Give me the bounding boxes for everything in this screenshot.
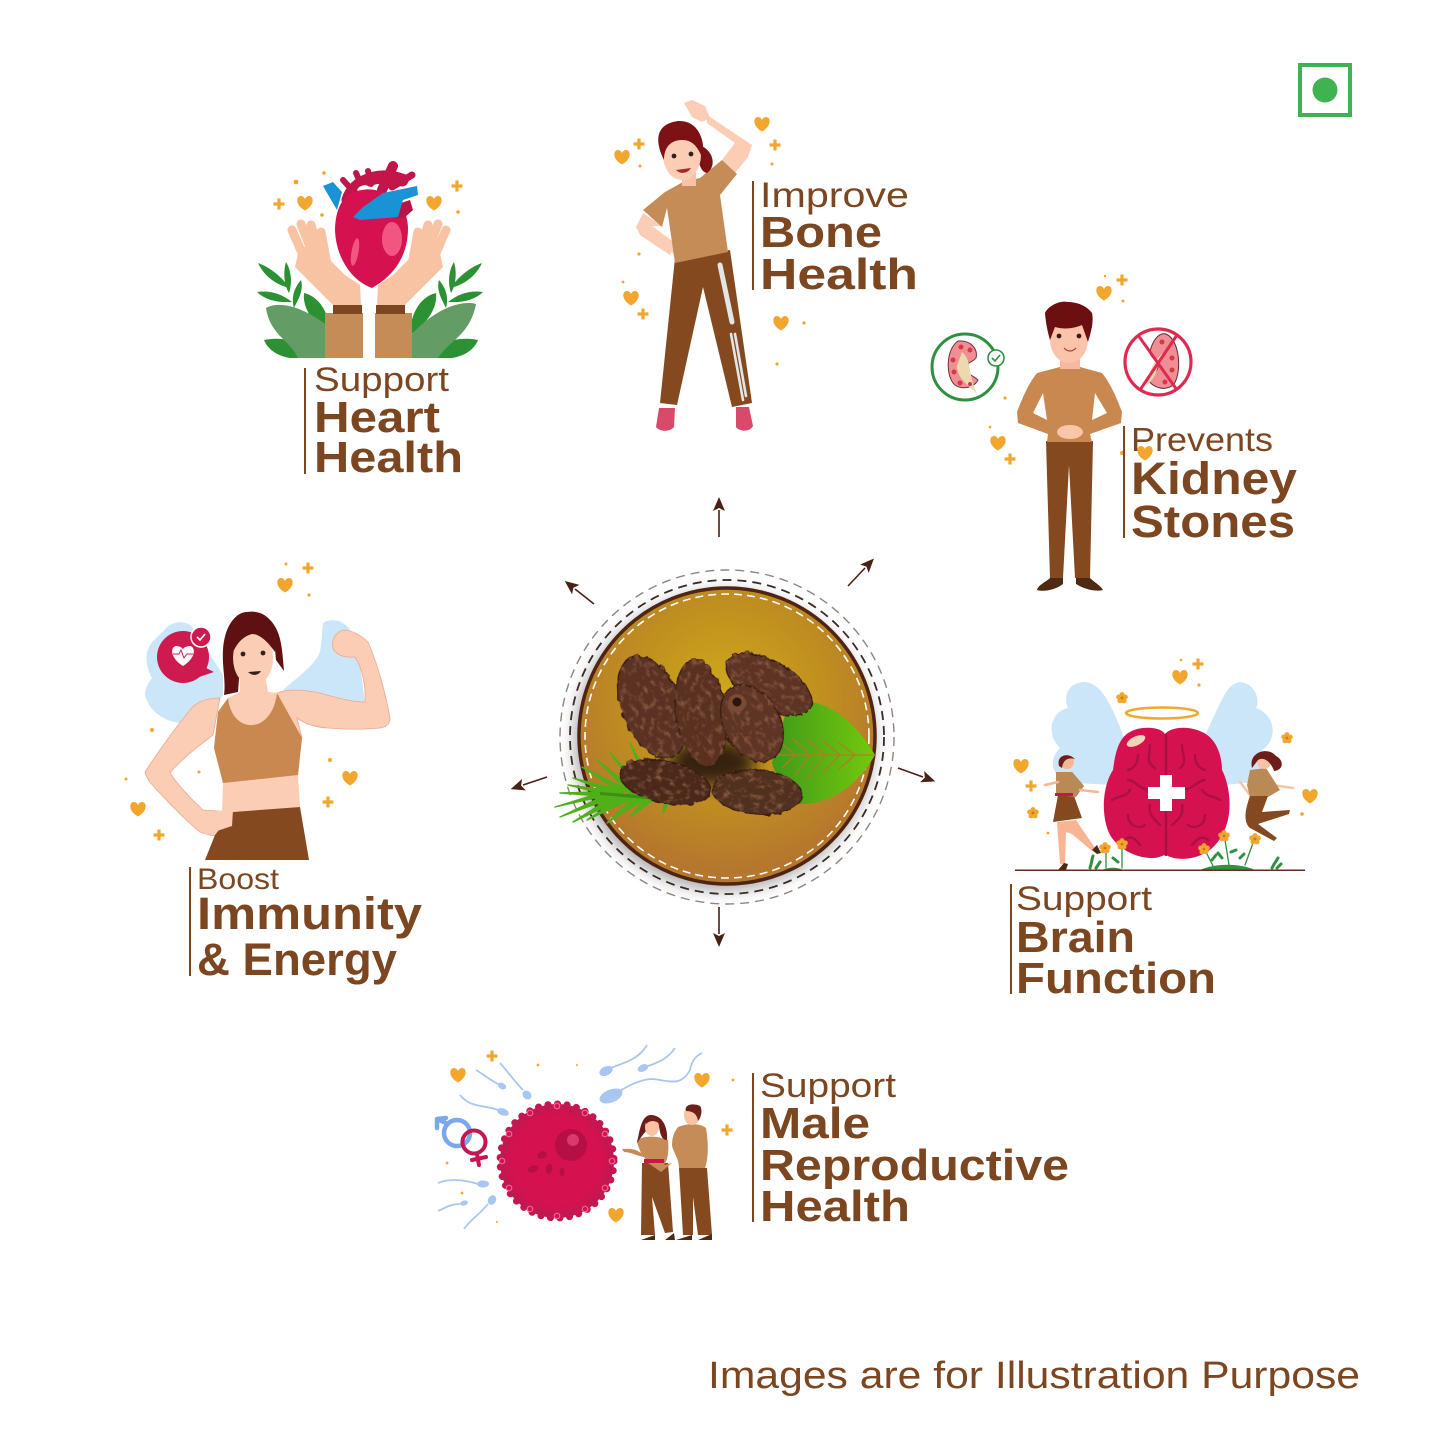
medical cross xyxy=(1148,775,1185,811)
stitched line xyxy=(585,594,869,878)
leg bones xyxy=(720,265,746,400)
illustration: man stretching with leg bones xyxy=(614,100,806,431)
label: support brain function: Brain xyxy=(1016,913,1135,962)
label: support heart health: Support xyxy=(314,361,450,399)
footnote: Images are for Illustration Purpose xyxy=(708,1355,1360,1397)
plate xyxy=(579,588,875,884)
label: prevents kidney stones: Stones xyxy=(1131,496,1295,547)
right arm xyxy=(277,630,390,738)
pants xyxy=(660,250,752,407)
label: improve bone health xyxy=(752,176,918,299)
dates xyxy=(604,640,822,818)
label: support heart health: Heart xyxy=(314,393,440,442)
label: support brain function: Support xyxy=(1016,880,1153,918)
neck and head xyxy=(658,121,713,186)
sparkles xyxy=(614,117,789,330)
ground line xyxy=(1015,870,1305,871)
label: support male reproductive health: Reproductive xyxy=(760,1141,1069,1190)
halo xyxy=(1126,708,1198,718)
brain xyxy=(1104,728,1230,859)
panel: male reproductive health xyxy=(437,1045,1069,1240)
egg cell xyxy=(499,1103,615,1219)
panel: immunity and energy xyxy=(124,562,422,985)
leaves xyxy=(257,262,483,358)
sparkles xyxy=(130,562,358,840)
illustration: winged brain xyxy=(1013,658,1318,871)
label: support male reproductive health: Health xyxy=(760,1182,910,1231)
dates shadow xyxy=(668,738,756,786)
hair xyxy=(223,612,284,695)
neck, chest and belly xyxy=(214,680,302,812)
sleeves xyxy=(325,313,412,358)
face xyxy=(233,622,275,686)
shirt and arms xyxy=(1017,367,1122,442)
arrows radiating from centre xyxy=(523,510,923,934)
label: boost immunity and energy: Immunity xyxy=(197,888,422,939)
label: prevents kidney stones xyxy=(1123,421,1297,547)
illustration: egg and couple xyxy=(437,1045,734,1240)
sparkles xyxy=(450,1050,732,1222)
neck and head xyxy=(1045,302,1093,369)
illustration: man with kidneys xyxy=(932,274,1191,591)
panel: kidney stones xyxy=(932,274,1297,591)
shorts xyxy=(205,807,309,860)
hand xyxy=(203,810,233,835)
wings xyxy=(1052,682,1273,785)
date hole xyxy=(728,694,746,712)
shoes xyxy=(641,1233,712,1240)
label: support heart health: Health xyxy=(314,433,463,482)
label: support heart health xyxy=(304,361,463,482)
illustration: woman flexing xyxy=(124,562,390,860)
sparkles xyxy=(990,274,1153,464)
label: improve bone health: Health xyxy=(760,250,918,299)
man xyxy=(672,1104,712,1235)
left arm xyxy=(145,698,233,836)
good kidney icon xyxy=(932,334,1004,400)
speech bubble heart xyxy=(157,627,214,683)
panel: heart health xyxy=(257,166,483,482)
wings xyxy=(145,620,365,725)
palm frond left xyxy=(555,743,682,823)
label: support brain function xyxy=(1010,880,1216,1003)
label: boost immunity and energy xyxy=(189,863,422,985)
crop top xyxy=(214,693,302,783)
sparkles xyxy=(274,180,462,210)
plants xyxy=(1090,830,1281,870)
plate shadow xyxy=(575,592,873,890)
label: support brain function: Function xyxy=(1016,954,1216,1003)
shoes xyxy=(656,407,753,431)
label: improve bone health: Bone xyxy=(760,208,882,257)
woman xyxy=(622,1115,673,1235)
raised arm xyxy=(707,115,752,173)
label: boost immunity and energy: Boost xyxy=(197,863,280,896)
bad kidney icon xyxy=(1125,329,1191,395)
label: support male reproductive health: Male xyxy=(760,1099,870,1148)
pants and shoes xyxy=(1046,441,1093,578)
label: support male reproductive health: Support xyxy=(760,1067,897,1105)
centre: dates on round plate xyxy=(555,570,894,904)
label: improve bone health: Improve xyxy=(760,176,909,215)
gender symbols xyxy=(437,1118,486,1165)
sparkles xyxy=(1013,658,1318,818)
heart xyxy=(323,166,418,288)
panel: bone health xyxy=(614,100,918,431)
hands xyxy=(292,224,446,265)
outer dashed rings xyxy=(560,570,894,904)
lowered arm xyxy=(636,213,675,255)
woman right xyxy=(1240,751,1293,841)
illustration: heart in hands xyxy=(257,166,483,358)
icon: vegetarian mark xyxy=(1300,65,1350,115)
palm leaf right xyxy=(772,701,875,804)
label: prevents kidney stones: Prevents xyxy=(1131,421,1273,458)
shirt xyxy=(643,160,737,263)
label: boost immunity and energy: & Energy xyxy=(197,934,397,985)
label: prevents kidney stones: Kidney xyxy=(1131,453,1297,504)
sperm cells xyxy=(459,1063,649,1206)
label: support male reproductive health xyxy=(752,1067,1069,1231)
woman left xyxy=(1045,755,1101,870)
panel: brain function xyxy=(1010,658,1318,1003)
